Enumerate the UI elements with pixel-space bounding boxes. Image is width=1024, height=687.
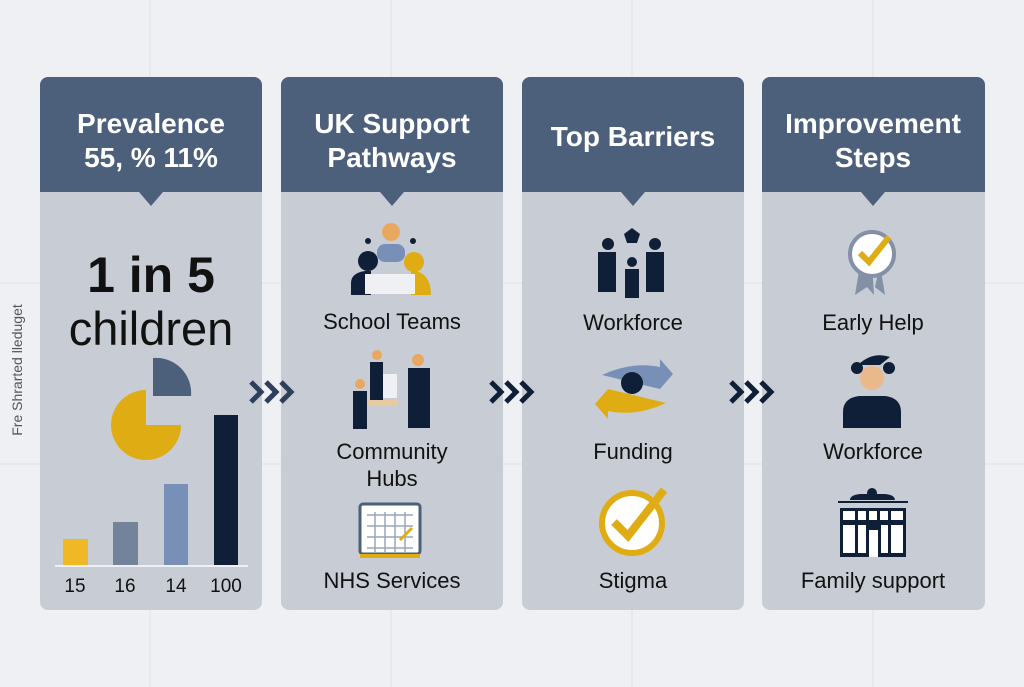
label: family support: Family support [801, 568, 945, 593]
header: barriers: Top Barriers [551, 121, 715, 152]
arrow 2 [491, 382, 531, 402]
label: stigma: Stigma [599, 568, 668, 593]
label: early help: Early Help [822, 310, 924, 335]
icon: calendar [360, 504, 420, 558]
big stat: children [69, 302, 233, 355]
label: funding: Funding [593, 439, 673, 464]
label: community hubs: Community [336, 439, 448, 464]
header: barriers [522, 77, 744, 206]
header: support [281, 77, 503, 206]
panel: support pathways [281, 77, 503, 610]
icon: funding [595, 359, 673, 419]
panel: prevalence [40, 77, 262, 610]
header: improvement [762, 77, 985, 206]
bar chart [55, 415, 248, 597]
header: improvement: Improvement [785, 108, 961, 139]
side label: Fre Shrarted lleduget [9, 304, 25, 436]
bar chart: 16 [114, 576, 136, 597]
header: prevalence [40, 77, 262, 206]
header: support: Pathways [327, 142, 457, 173]
icon: person [843, 355, 901, 428]
panel: improvement [762, 77, 985, 610]
icon: workforce [598, 228, 664, 298]
icon: school teams [351, 223, 431, 295]
header: improvement: Steps [835, 142, 911, 173]
bar chart: 100 [210, 576, 242, 597]
header: support: UK Support [314, 108, 470, 139]
big stat: 1 in 5 [87, 247, 215, 303]
label: nhs services: NHS Services [324, 568, 460, 593]
label: school teams: School Teams [323, 309, 461, 334]
arrow 1 [251, 382, 291, 402]
label: workforce: Workforce [583, 310, 683, 335]
icon: check [602, 490, 664, 553]
pie chart [111, 358, 191, 460]
icon: community hubs [353, 350, 430, 429]
header: prevalence: 55, % 11% [84, 142, 218, 173]
panel: barriers [522, 77, 744, 610]
label: workforce 2: Workforce [823, 439, 923, 464]
icon: ribbon [850, 232, 894, 295]
arrow 3 [731, 382, 771, 402]
header: prevalence: Prevalence [77, 108, 225, 139]
bar chart: 14 [165, 576, 187, 597]
label: community hubs: Hubs [366, 466, 418, 491]
bar chart: 15 [64, 576, 86, 597]
label: community hubs [336, 439, 448, 491]
big stat [69, 247, 233, 355]
icon: building [838, 488, 908, 557]
